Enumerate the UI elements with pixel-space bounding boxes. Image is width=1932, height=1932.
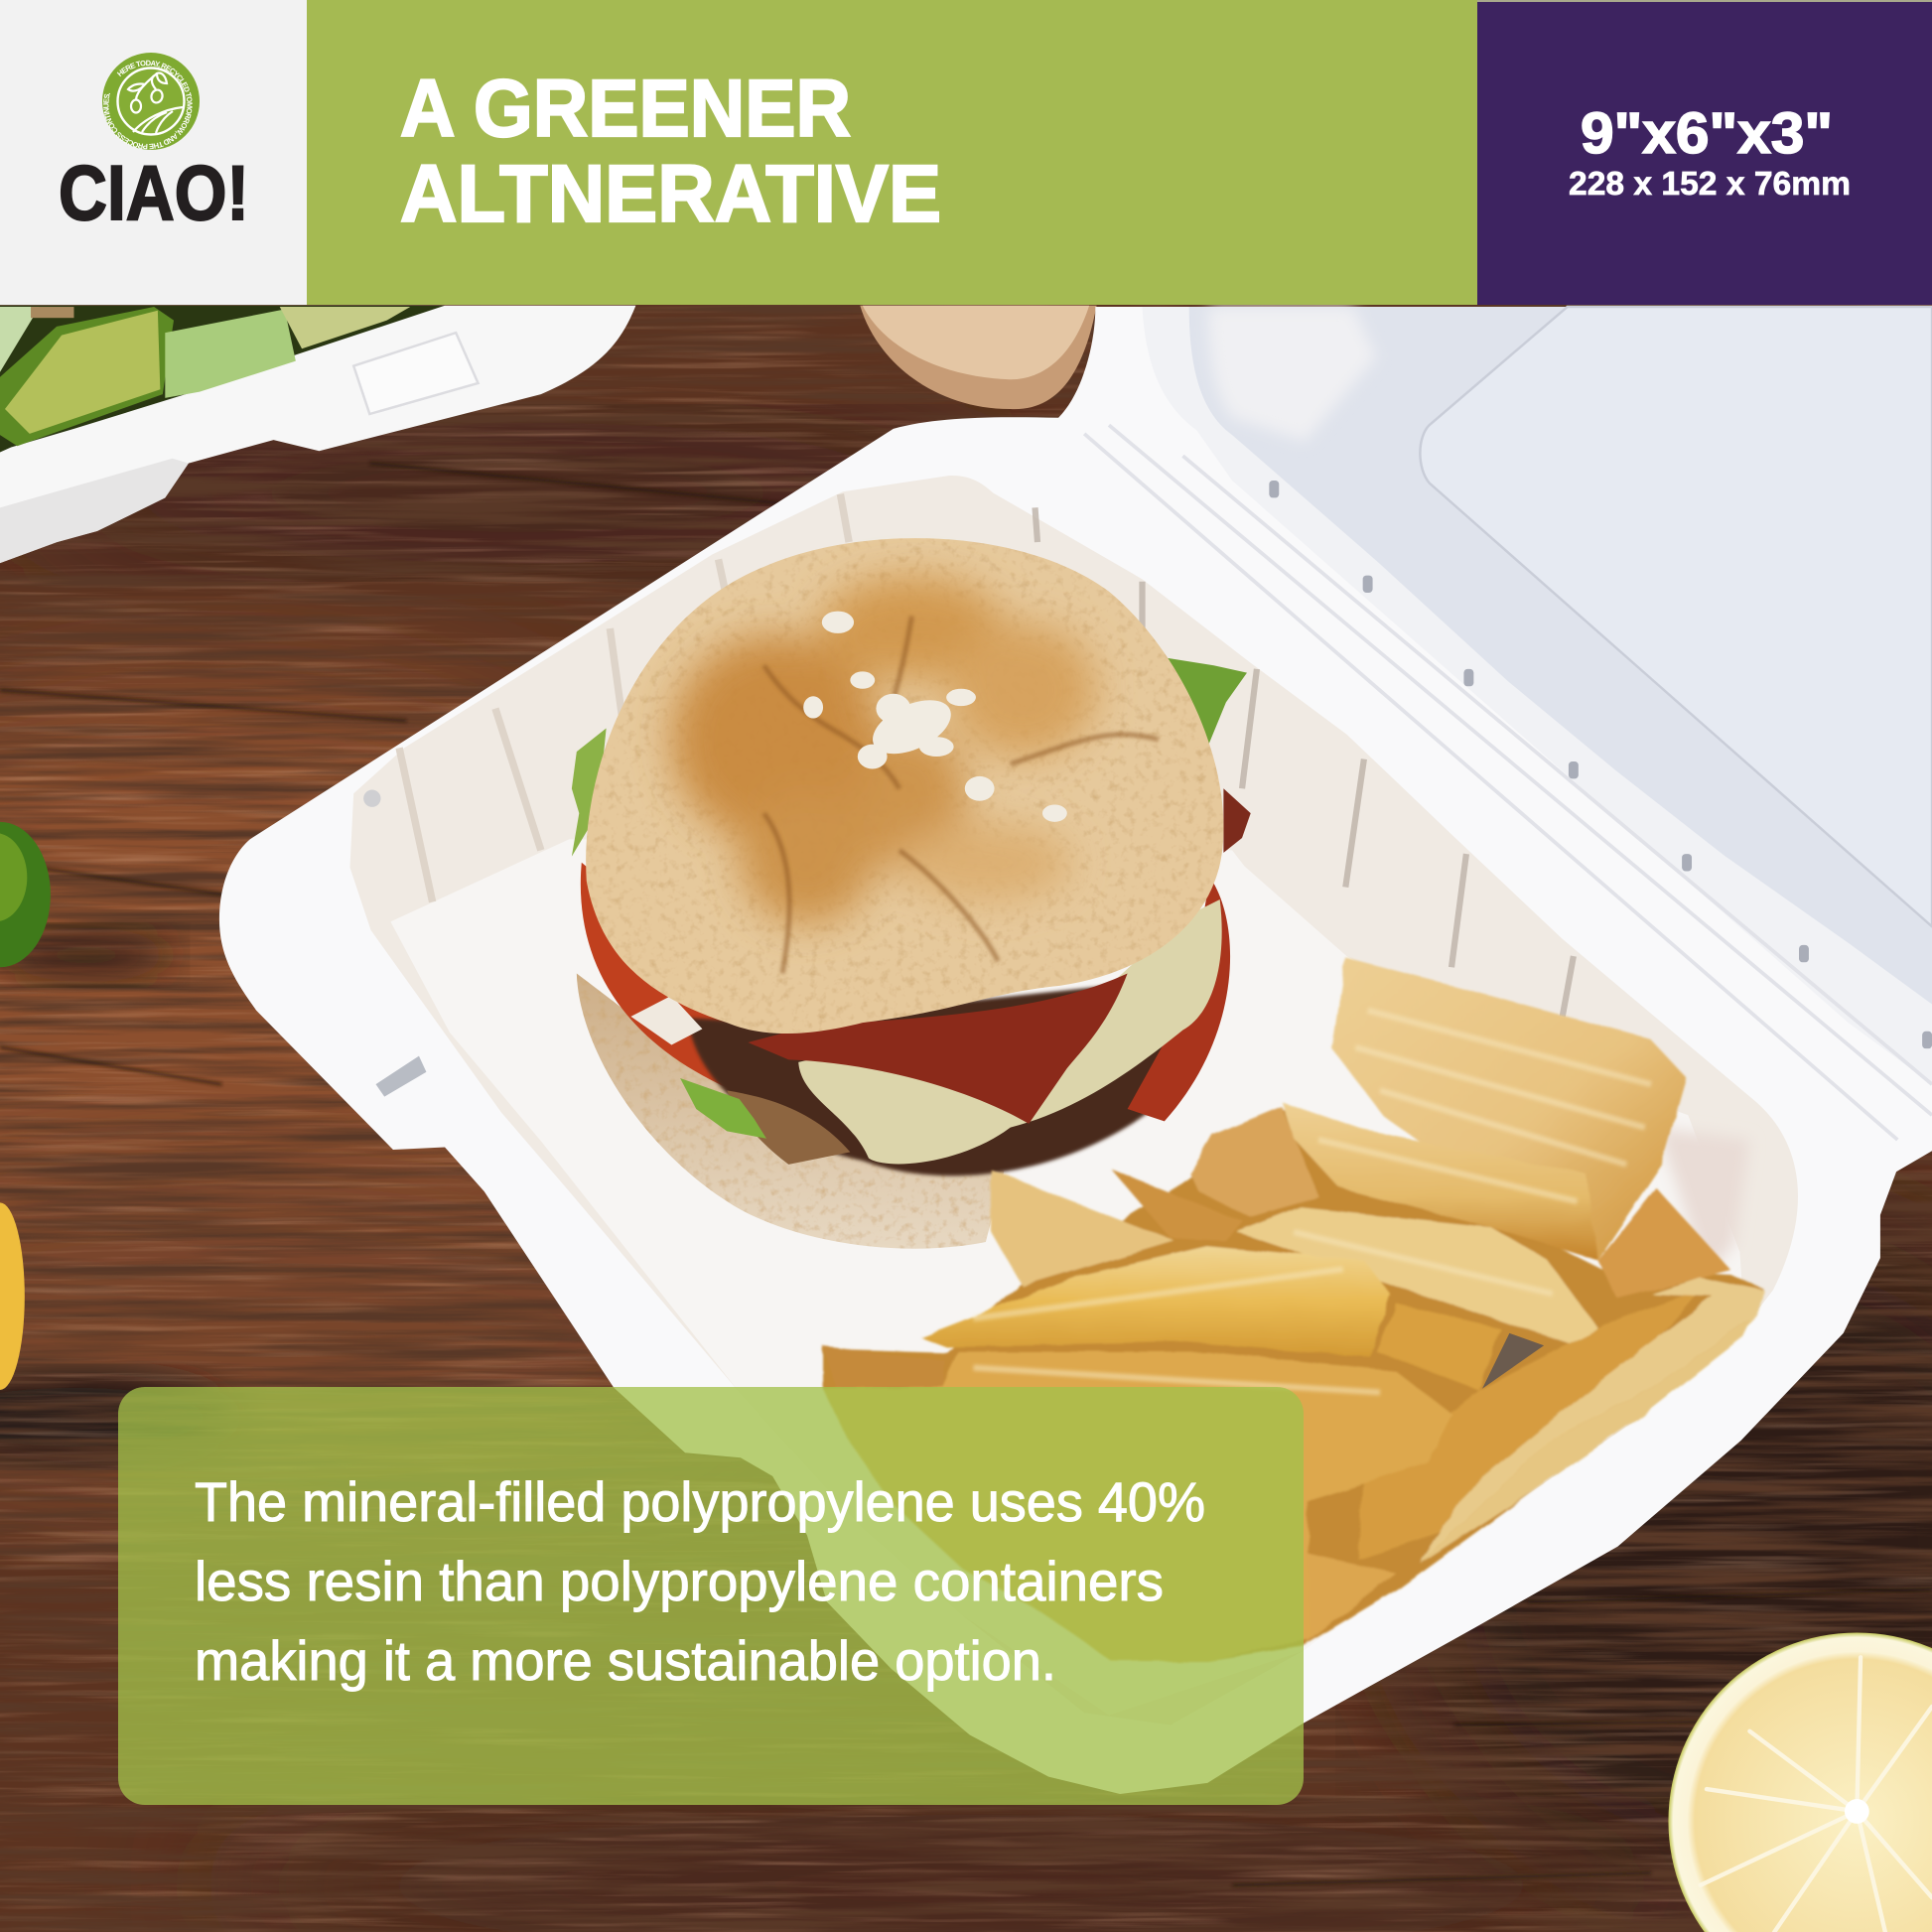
tray ribs xyxy=(399,494,849,901)
fries xyxy=(823,957,1765,1661)
title xyxy=(400,64,941,239)
bun creases xyxy=(763,617,1159,973)
hinge ridges xyxy=(1084,425,1932,1140)
open lid surface xyxy=(1084,307,1932,1140)
olive branch xyxy=(128,73,183,133)
logo wordmark: CIAO! xyxy=(59,149,249,236)
second container top left with salad xyxy=(0,306,635,563)
right wall shade xyxy=(1657,1128,1749,1276)
callout text: The mineral-filled polypropylene uses 40% xyxy=(195,1470,1205,1533)
patty xyxy=(688,986,1192,1175)
tray inner walls xyxy=(349,476,1798,1725)
oats on bun xyxy=(803,612,1067,822)
callout text: making it a more sustainable option. xyxy=(195,1629,1056,1692)
bacon xyxy=(748,973,1128,1124)
lime at left edge xyxy=(0,822,173,982)
golden crust patches xyxy=(671,577,1097,924)
dimensions in millimetres: 228 x 152 x 76mm xyxy=(1569,165,1851,202)
callout panel xyxy=(118,1387,1304,1805)
header: logo panel xyxy=(0,0,307,305)
callout text xyxy=(195,1470,1205,1692)
lemon at left edge xyxy=(0,1202,25,1390)
title: ALTNERATIVE xyxy=(400,149,941,239)
header: green title panel xyxy=(307,0,1477,305)
bacon end right xyxy=(1223,788,1251,853)
lettuce bottom xyxy=(680,1078,766,1139)
container body: tray and lid rim xyxy=(219,307,1932,1794)
dimensions in inches: 9"x6"x3" xyxy=(1581,101,1833,166)
tray interior xyxy=(349,476,1798,1725)
lid inner panel xyxy=(1420,307,1932,926)
wooden board top centre xyxy=(860,306,1097,409)
tomato left xyxy=(581,863,801,1097)
cheese xyxy=(798,899,1222,1164)
gap between fries xyxy=(1482,1333,1544,1389)
header: purple dimensions panel xyxy=(1477,0,1932,305)
tray floor paper xyxy=(390,839,1744,1716)
callout text: less resin than polypropylene containers xyxy=(195,1550,1164,1612)
ring text: HERE TODAY, RECYCLED TOMORROW, AND THE PROCESS CONTINUES. xyxy=(103,60,193,149)
burger xyxy=(572,538,1251,1249)
logo badge xyxy=(102,53,200,150)
mayo xyxy=(630,996,702,1044)
top bun xyxy=(586,538,1223,1034)
tomato right xyxy=(1128,878,1230,1121)
dark grain lines xyxy=(0,464,1932,1885)
fry ridges xyxy=(973,1011,1651,1392)
crumb crust xyxy=(727,1090,850,1165)
lettuce behind bun xyxy=(572,658,1247,857)
lid rim snaps xyxy=(1269,481,1932,1048)
fries shadow underlay xyxy=(823,1109,1764,1661)
lemon slice bottom right xyxy=(1668,1632,1932,1932)
title: A GREENER xyxy=(400,64,851,154)
tray rim pegs xyxy=(376,1056,426,1097)
lower bun xyxy=(577,973,1004,1249)
